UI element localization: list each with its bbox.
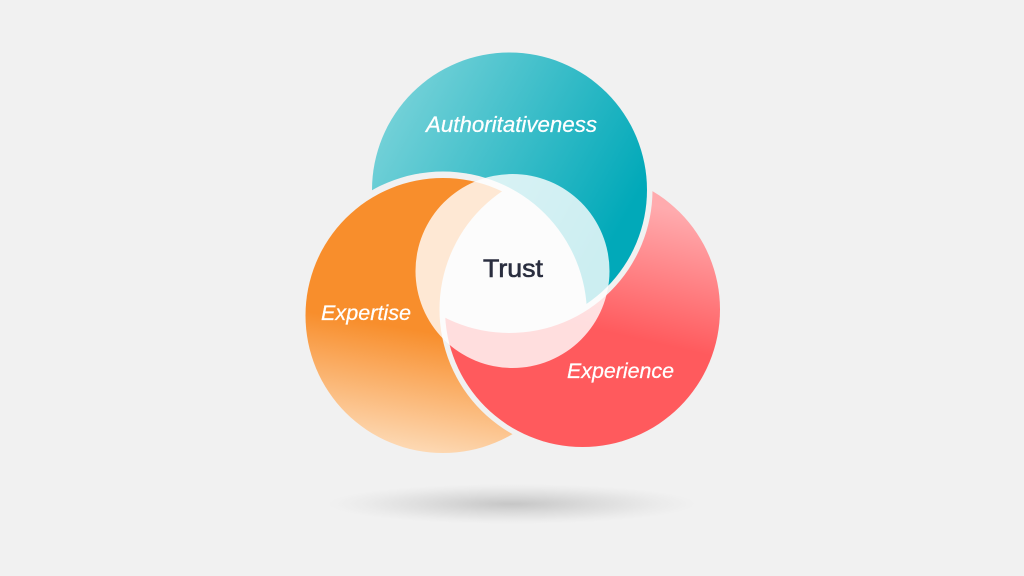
circle: Authoritativeness: [372, 52, 647, 328]
circle: Expertise: [306, 178, 512, 453]
center overlap circle: [416, 174, 610, 368]
label: Expertise: Expertise: [321, 302, 411, 325]
ground shadow: [328, 484, 696, 524]
circle: Experience: [445, 172, 720, 447]
label: Experience: Experience: [567, 360, 674, 383]
label: Trust: Trust: [483, 255, 543, 283]
label: Authoritativeness: Authoritativeness: [424, 112, 597, 137]
